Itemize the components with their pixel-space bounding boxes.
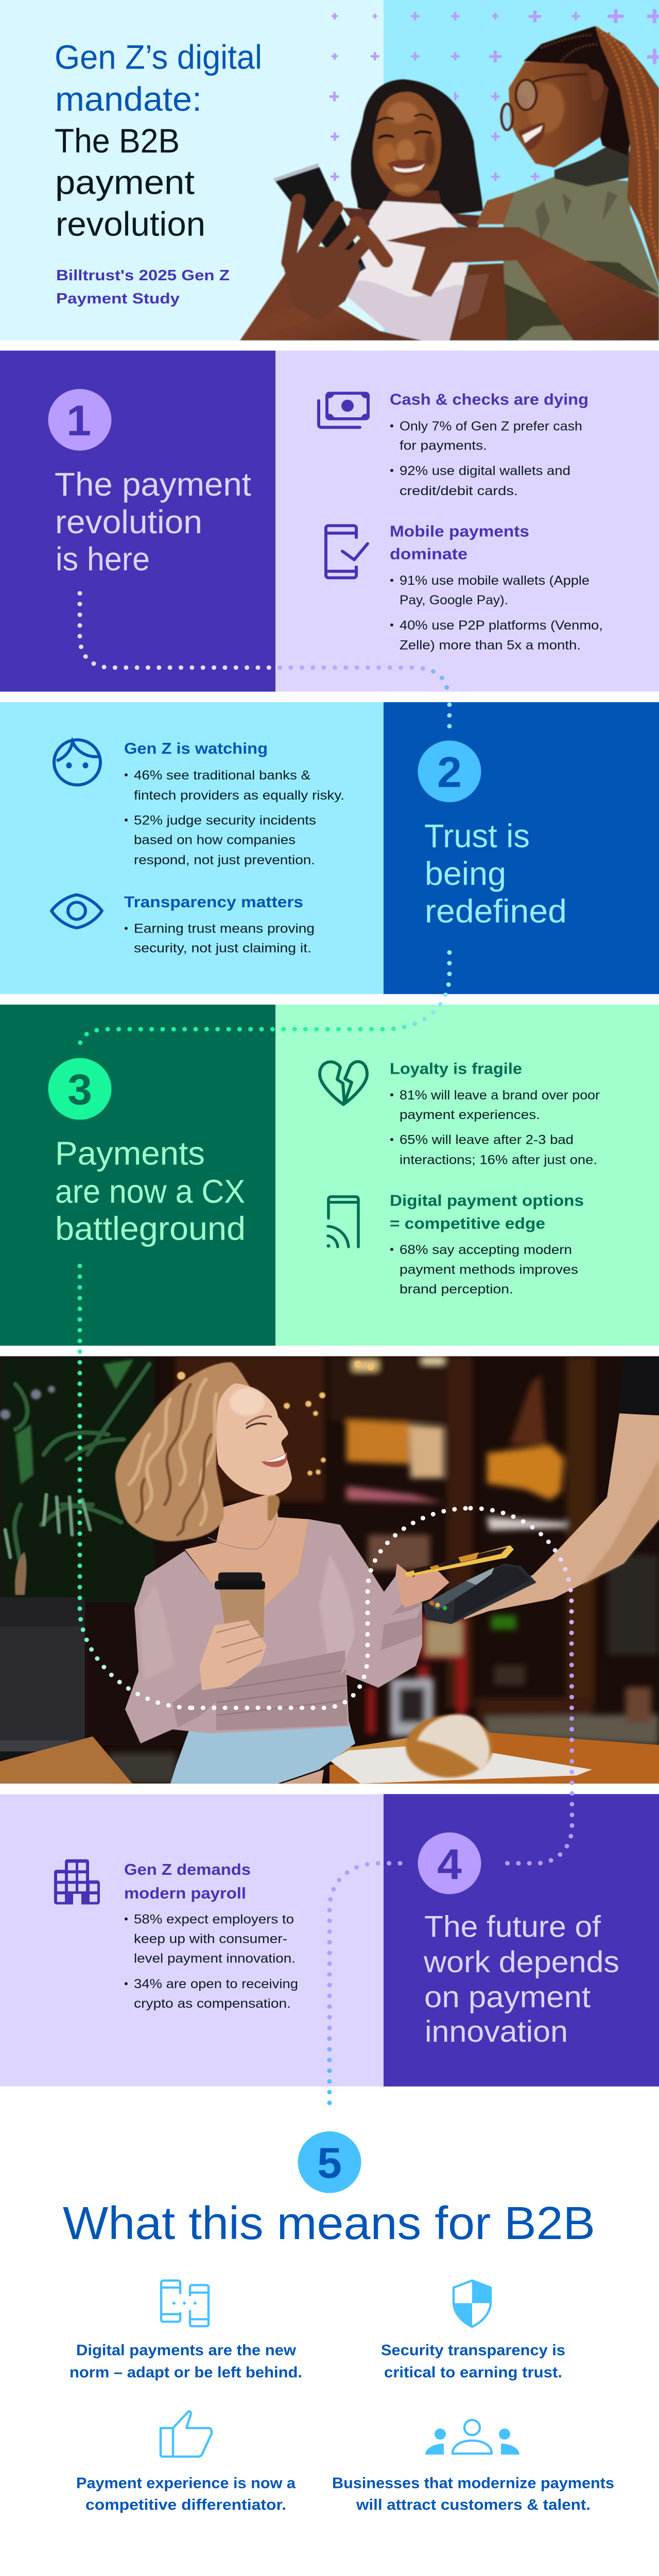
- jeans: [170, 1722, 355, 1784]
- block: digital payment options: [390, 1192, 584, 1297]
- number badge 2: 2: [437, 748, 462, 796]
- number badge 1: [48, 389, 111, 451]
- block: mobile payments: [390, 523, 603, 653]
- block: loyalty is fragile: payment experiences.: [400, 1108, 540, 1122]
- server arm: [464, 1413, 659, 1619]
- block: mobile payments: dominate: [390, 546, 467, 563]
- woman two olive top: [504, 177, 659, 341]
- section 1 heading: The payment: [55, 466, 251, 503]
- hand holding phone: [393, 1563, 449, 1607]
- dotted connector path: [80, 594, 572, 2113]
- icon: eye: [51, 895, 102, 928]
- icon: people: [425, 2420, 519, 2454]
- icon: two phones: [161, 2281, 209, 2326]
- section 4 heading: on payment: [424, 1980, 591, 2014]
- takeaway: modernize payments: [332, 2475, 614, 2513]
- takeaway: security transparency: Security transparency is: [381, 2342, 565, 2359]
- server black sleeve: [618, 1356, 659, 1413]
- hero title: mandate:: [55, 80, 202, 118]
- block: transparency matters: Transparency matters: [124, 893, 303, 911]
- panel: section 4 the future of work: [0, 1794, 659, 2087]
- plant pot: [0, 1598, 85, 1758]
- section 1 heading: is here: [56, 540, 150, 578]
- woman one shoulders: [342, 208, 483, 231]
- block: mobile payments: Zelle) more than 5x a month.: [400, 638, 581, 653]
- takeaway: digital payments: [70, 2342, 302, 2381]
- table and pastry tray: [330, 1715, 659, 1784]
- block: mobile payments: 40% use P2P platforms (Venmo,: [400, 618, 603, 633]
- cafe background: [82, 1356, 659, 1784]
- section 5 heading: What this means for B2B: [63, 2198, 595, 2249]
- block: transparency matters: Earning trust means proving: [134, 922, 315, 936]
- section 1 heading: revolution: [55, 503, 202, 540]
- photo: woman paying with phone at cafe: [0, 1356, 659, 1784]
- hero subtitle: Payment Study: [56, 291, 180, 307]
- section 4 heading: innovation: [425, 2014, 568, 2048]
- woman two lower arm: [449, 263, 507, 341]
- block: modern payroll: Gen Z demands: [124, 1861, 251, 1878]
- section 3 heading: are now a CX: [55, 1173, 245, 1210]
- panel: section 5 what this means for b2b: [63, 2131, 614, 2513]
- woman one hair: [351, 79, 483, 216]
- icon: office building: [54, 1859, 100, 1904]
- section 2 heading: Trust is: [424, 817, 530, 854]
- block: digital payment options: 68% say accepting modern: [400, 1243, 572, 1257]
- section 3 heading: [55, 1134, 246, 1247]
- woman one fingers and palm: [288, 200, 386, 282]
- number badge 4: 4: [437, 1840, 462, 1888]
- block: cash and checks: Only 7% of Gen Z prefer cash: [400, 419, 582, 433]
- number badge 5: [298, 2131, 361, 2193]
- icon: face: [54, 740, 100, 785]
- section 3 heading: Payments: [55, 1134, 205, 1172]
- number badge 4: [418, 1833, 481, 1894]
- hero subtitle: Billtrust's 2025 Gen Z: [56, 268, 230, 284]
- hero title: payment: [55, 164, 195, 202]
- number badge 3: [48, 1058, 111, 1120]
- plant: [0, 1356, 154, 1602]
- hero title: The B2B: [55, 122, 180, 160]
- section 3 heading: battleground: [55, 1210, 246, 1247]
- woman two smile: [518, 123, 545, 150]
- woman hair: [115, 1362, 280, 1541]
- block: modern payroll: modern payroll: [124, 1885, 246, 1902]
- block: modern payroll: 34% are open to receiving: [134, 1977, 298, 1991]
- section 4 heading: work depends: [423, 1945, 619, 1979]
- block: digital payment options: = competitive edge: [390, 1215, 545, 1232]
- yellow phone: [404, 1545, 514, 1577]
- card terminal: [423, 1563, 536, 1624]
- panel: section 2 trust is being redefined: [0, 702, 659, 994]
- hero title: revolution: [56, 205, 205, 243]
- number badge 5: 5: [317, 2139, 342, 2187]
- coffee cup: [215, 1572, 265, 1638]
- woman two dark hair: [524, 26, 630, 156]
- block: gen z is watching: fintech providers as equally risky.: [134, 788, 344, 803]
- woman neck and chest: [185, 1492, 309, 1607]
- block: digital payment options: Digital payment options: [390, 1192, 584, 1209]
- block: mobile payments: 91% use mobile wallets (Apple: [400, 573, 589, 588]
- takeaway: digital payments: norm – adapt or be left behind.: [70, 2364, 302, 2381]
- block: loyalty is fragile: 65% will leave after 2-3 bad: [400, 1133, 574, 1147]
- block: transparency matters: [124, 893, 315, 956]
- block: cash and checks: 92% use digital wallets and: [400, 464, 570, 478]
- block: gen z is watching: [124, 740, 344, 867]
- takeaway: modernize payments: will attract customers & talent.: [356, 2497, 591, 2513]
- block: modern payroll: 58% expect employers to: [134, 1912, 294, 1926]
- hero title: Gen Z’s digital: [55, 38, 262, 76]
- icon: contactless phone: [326, 1197, 358, 1248]
- number badge 1: 1: [66, 396, 91, 445]
- block: cash and checks: Cash & checks are dying: [390, 391, 588, 409]
- block: modern payroll: level payment innovation.: [134, 1952, 296, 1965]
- photo: two women looking at a phone: [240, 26, 659, 341]
- section 2 heading: [424, 817, 567, 929]
- block: transparency matters: security, not just claiming it.: [134, 941, 311, 956]
- takeaway: security transparency: critical to earning trust.: [384, 2364, 562, 2381]
- woman two pointing hand: [386, 227, 659, 341]
- block: cash and checks: [390, 391, 588, 498]
- panel: section 3 payments are a cx battleground: [0, 1005, 659, 1346]
- string lights: [108, 1360, 374, 1476]
- woman two ear: [589, 70, 603, 101]
- block: gen z is watching: respond, not just prevention.: [134, 853, 315, 867]
- block: digital payment options: brand perception.: [400, 1282, 513, 1297]
- woman two turtleneck: [553, 146, 630, 187]
- woman one white top: [354, 200, 468, 298]
- woman one forearm: [240, 274, 423, 341]
- section 4 heading: [423, 1909, 619, 2048]
- woman two glasses: [501, 74, 587, 130]
- section 4 heading: The future of: [424, 1909, 601, 1944]
- block: mobile payments: Mobile payments: [390, 523, 529, 540]
- block: gen z is watching: 46% see traditional banks &: [134, 768, 310, 783]
- number badge 2: [418, 740, 481, 802]
- panel: hero: [0, 0, 659, 341]
- icon: cash: [319, 393, 368, 427]
- block: modern payroll: keep up with consumer-: [134, 1932, 287, 1946]
- block: loyalty is fragile: 81% will leave a brand over poor: [400, 1088, 600, 1103]
- necklace: [208, 1517, 276, 1549]
- takeaway: modernize payments: Businesses that modernize payments: [332, 2475, 614, 2492]
- block: loyalty is fragile: interactions; 16% after just one.: [400, 1153, 597, 1167]
- block: loyalty is fragile: Loyalty is fragile: [390, 1060, 522, 1077]
- block: cash and checks: for payments.: [400, 439, 487, 453]
- takeaway: payment experience: competitive differentiator.: [85, 2497, 286, 2513]
- takeaway: security transparency: [381, 2342, 565, 2381]
- woman one face: [373, 92, 441, 197]
- block: digital payment options: payment methods improves: [400, 1263, 578, 1277]
- takeaway: digital payments: Digital payments are the new: [76, 2342, 297, 2359]
- panel: section 1 the payment revolution: [0, 350, 659, 691]
- woman face: [216, 1383, 292, 1495]
- icon: broken heart: [320, 1062, 367, 1105]
- hero subtitle: [56, 268, 230, 307]
- icon: thumbs up: [161, 2411, 212, 2456]
- icon: mobile check: [326, 526, 368, 578]
- block: mobile payments: Pay, Google Pay).: [400, 593, 508, 607]
- plus-sign pattern: [330, 9, 659, 181]
- number badge 3: 3: [67, 1065, 92, 1113]
- icon: shield: [454, 2281, 491, 2327]
- phone in hand: [273, 163, 366, 277]
- wooden bench: [0, 1736, 132, 1784]
- block: modern payroll: crypto as compensation.: [134, 1996, 291, 2011]
- section 2 heading: redefined: [425, 892, 567, 929]
- woman two shoulder: [476, 192, 514, 224]
- woman two face: [509, 62, 609, 167]
- takeaway: payment experience: [76, 2475, 296, 2513]
- hand on cup: [200, 1620, 267, 1690]
- block: gen z is watching: Gen Z is watching: [124, 740, 268, 757]
- section 1 heading: [55, 466, 251, 578]
- block: modern payroll: [124, 1861, 298, 2011]
- block: gen z is watching: based on how companies: [134, 833, 296, 847]
- block: gen z is watching: 52% judge security incidents: [134, 814, 316, 827]
- section 2 heading: being: [425, 855, 506, 892]
- woman blouse: [125, 1519, 422, 1743]
- block: loyalty is fragile: [390, 1060, 600, 1167]
- woman one neck: [385, 190, 442, 204]
- woman two braids: [595, 26, 659, 285]
- hero title: [55, 38, 262, 243]
- block: cash and checks: credit/debit cards.: [400, 484, 518, 498]
- takeaway: payment experience: Payment experience is now a: [76, 2475, 296, 2492]
